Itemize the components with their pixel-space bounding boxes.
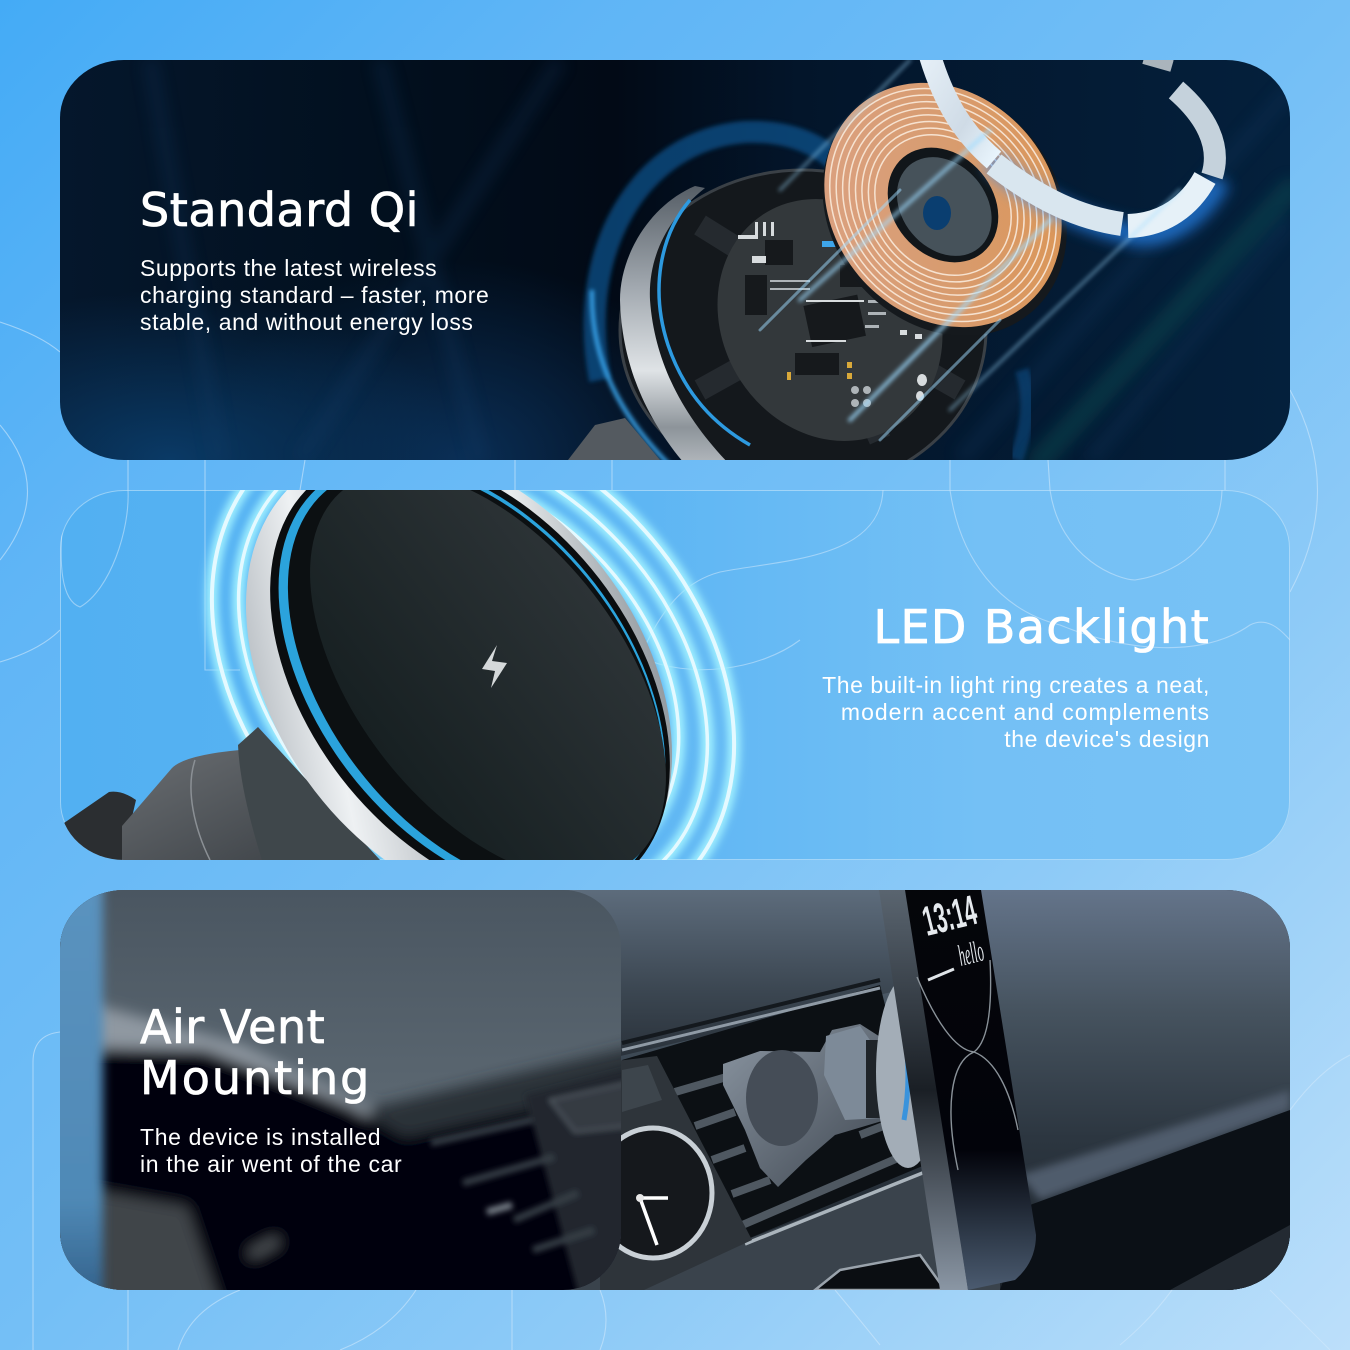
vent mount xyxy=(723,1024,892,1187)
body text xyxy=(822,672,1210,752)
light streaks xyxy=(760,60,1290,460)
wheel and vent shapes xyxy=(60,995,640,1330)
panel: LED Backlight xyxy=(60,490,1290,860)
blue edge strip xyxy=(40,870,103,1310)
body text: in the air went of the car xyxy=(140,1151,402,1177)
icon: lightning bolt xyxy=(482,645,507,688)
body text xyxy=(140,255,489,335)
body text: modern accent and complements xyxy=(841,699,1210,725)
bracket xyxy=(568,418,660,460)
copper coil xyxy=(771,34,1117,385)
phone xyxy=(879,887,1036,1290)
panel: Standard Qi xyxy=(60,60,1290,460)
bracket xyxy=(64,727,380,860)
body text: The built-in light ring creates a neat, xyxy=(822,672,1210,698)
decorative panel curves xyxy=(60,490,1290,670)
charger disc xyxy=(158,365,760,995)
phone greeting: hello xyxy=(955,935,987,972)
body text: the device's design xyxy=(1004,726,1210,752)
circuit board xyxy=(674,158,986,482)
glow rings xyxy=(107,306,839,1038)
heading: LED Backlight xyxy=(873,600,1210,654)
illustration: charger exploded view xyxy=(147,60,1290,460)
heading xyxy=(140,1000,371,1105)
magnetic disc xyxy=(876,976,940,1168)
panel: Air Vent Mounting xyxy=(60,890,1290,1290)
photo: car dashboard scene xyxy=(60,890,1290,1290)
frosted blurred overlay xyxy=(60,890,621,1290)
body text xyxy=(140,1124,402,1177)
housing xyxy=(620,170,986,490)
dashboard xyxy=(60,890,1290,1290)
body text: charging standard – faster, more xyxy=(140,282,489,308)
illustration: charger with light rings xyxy=(64,490,744,860)
body text: The device is installed xyxy=(140,1124,381,1150)
background rays xyxy=(150,60,1290,460)
blurred interior xyxy=(60,890,621,1290)
body text: Supports the latest wireless xyxy=(140,255,437,281)
heading: Standard Qi xyxy=(140,183,419,237)
metal ring xyxy=(930,56,1220,235)
blue halo ring xyxy=(595,132,840,380)
air vent xyxy=(622,980,945,1290)
body text: stable, and without energy loss xyxy=(140,309,473,335)
heading: Air Vent xyxy=(140,1000,325,1054)
clock panel xyxy=(594,1056,752,1290)
heading: Mounting xyxy=(140,1051,371,1105)
